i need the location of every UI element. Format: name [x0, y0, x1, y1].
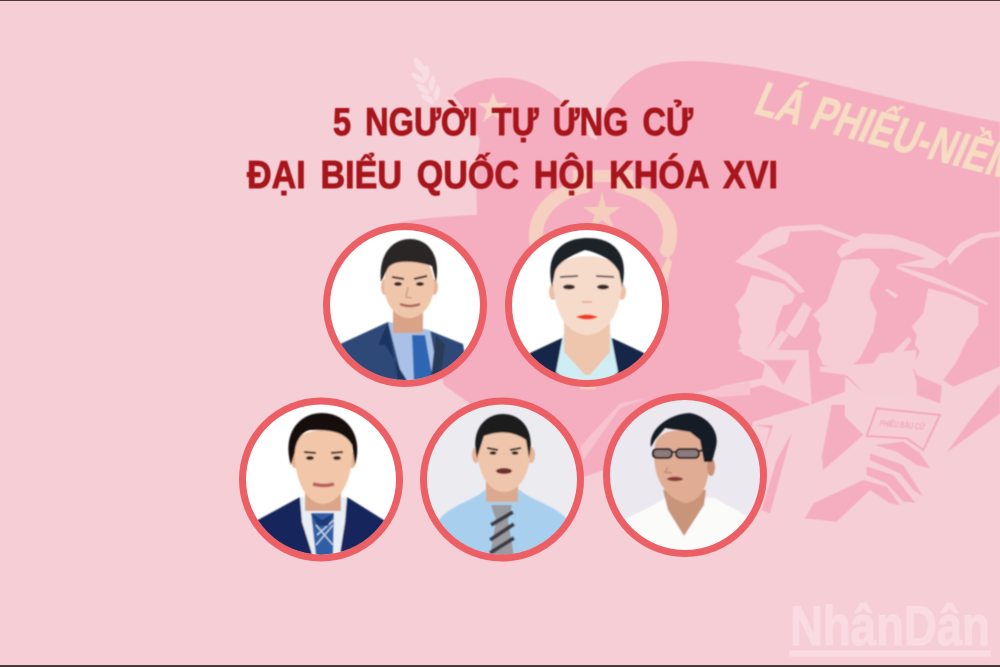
light torso areas: [720, 350, 812, 405]
light stripes beside portrait 5: [580, 382, 750, 460]
soldier 2 helmet band: [837, 233, 947, 268]
soldier 2 face: [813, 258, 880, 370]
ballot paper: [867, 408, 940, 450]
portrait 4: man in light blue shirt with striped tie: [424, 401, 580, 565]
portrait ring: [242, 401, 400, 558]
eyeglasses: [653, 449, 711, 458]
soldier 1 helmet rim: [735, 224, 858, 293]
title line 2: ĐẠI BIỂU QUỐC HỘI KHÓA XVI: [247, 152, 778, 197]
pink flag shape: [400, 61, 1000, 478]
portrait ring: [424, 401, 580, 558]
soldier 1 chin strap: [760, 302, 812, 362]
soldier 3 helmet brim: [897, 265, 988, 305]
portrait ring: [326, 226, 484, 384]
portrait 5: older man in white shirt with glasses: [606, 396, 764, 560]
title: [247, 100, 778, 197]
soldier 3 helmet arc: [947, 232, 1000, 265]
portrait ring: [508, 226, 666, 384]
sleeve shard: [822, 405, 863, 470]
flag star: [478, 92, 508, 122]
illustrated soldiers: faces and helmets: [735, 224, 1000, 385]
national emblem: [536, 170, 672, 389]
portrait ring: [606, 396, 764, 554]
right collar shard: [917, 383, 942, 403]
shards beside portrait: [755, 425, 792, 513]
soldier 3 face: [912, 288, 978, 385]
poster artwork background: [400, 55, 1000, 530]
portrait 2: young woman in navy jacket: [508, 226, 666, 385]
portrait 3: man in dark suit with checked tie: [242, 401, 400, 565]
portrait 1: man in navy suit with blue tie: [326, 226, 484, 385]
hand fingers: [805, 442, 930, 522]
wheat sprig: [410, 55, 441, 106]
soldier 1 face: [735, 275, 795, 358]
collar shard: [762, 360, 797, 385]
small strap highlights: [885, 288, 955, 363]
title line 1: 5 NGƯỜI TỰ ỨNG CỬ: [333, 100, 694, 144]
soldier bodies: [720, 350, 1000, 530]
ballot paper: PHIẾU BẦU CỬ: [879, 417, 926, 432]
